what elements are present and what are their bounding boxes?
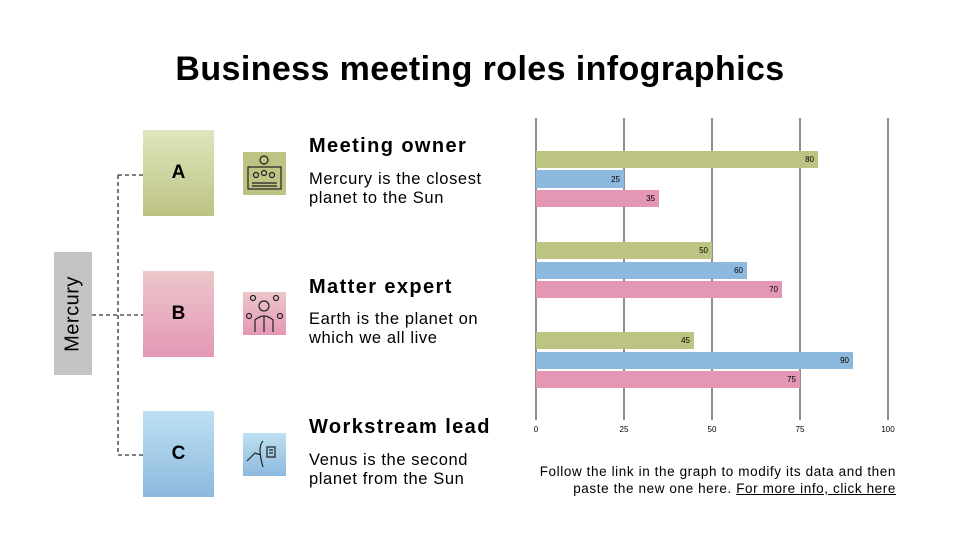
box A: A xyxy=(172,162,185,183)
text: Workstream lead: Venus is the second xyxy=(309,451,468,469)
bar chart: 75 xyxy=(796,425,805,434)
bar chart: 60 xyxy=(734,266,744,275)
bar chart: 100 xyxy=(881,425,895,434)
text: Meeting owner: planet to the Sun xyxy=(309,189,444,207)
bar chart: 70 xyxy=(769,285,779,294)
title: Business meeting roles infographics xyxy=(175,50,785,88)
caption: Follow the link in the graph to modify its data and then xyxy=(540,464,896,479)
text: Workstream lead: planet from the Sun xyxy=(309,470,464,488)
bar chart: 25 xyxy=(620,425,629,434)
caption xyxy=(540,464,896,496)
text: Matter expert: Matter expert xyxy=(309,276,453,298)
box B xyxy=(143,271,214,357)
bar chart: 90 xyxy=(840,356,850,365)
bar chart: 35 xyxy=(646,194,656,203)
bar chart: 50 xyxy=(699,246,709,255)
icon: matter expert xyxy=(243,292,286,335)
text: Matter expert: which we all live xyxy=(309,329,438,347)
bar chart: 45 xyxy=(681,336,691,345)
text: Matter expert xyxy=(309,276,478,347)
icon: meeting owner xyxy=(243,152,286,195)
text: Meeting owner: Meeting owner xyxy=(309,135,467,157)
box C xyxy=(143,411,214,497)
box B: B xyxy=(172,303,185,324)
text: Meeting owner xyxy=(309,135,482,207)
bar chart: 75 xyxy=(787,375,797,384)
text: Workstream lead: Workstream lead xyxy=(309,416,491,438)
bar chart: 25 xyxy=(611,175,621,184)
label: Mercury xyxy=(54,252,92,375)
text: Matter expert: Earth is the planet on xyxy=(309,310,478,328)
text: Workstream lead xyxy=(309,416,491,488)
bar chart: 80 xyxy=(805,155,815,164)
box A xyxy=(143,130,214,216)
caption: paste the new one here. For more info, click here xyxy=(573,481,896,496)
icon: workstream lead xyxy=(243,433,286,476)
label: Mercury: Mercury xyxy=(62,276,84,351)
bar chart: 50 xyxy=(708,425,717,434)
bar chart: 0 xyxy=(534,425,539,434)
text: Meeting owner: Mercury is the closest xyxy=(309,170,482,188)
box C: C xyxy=(172,443,185,464)
